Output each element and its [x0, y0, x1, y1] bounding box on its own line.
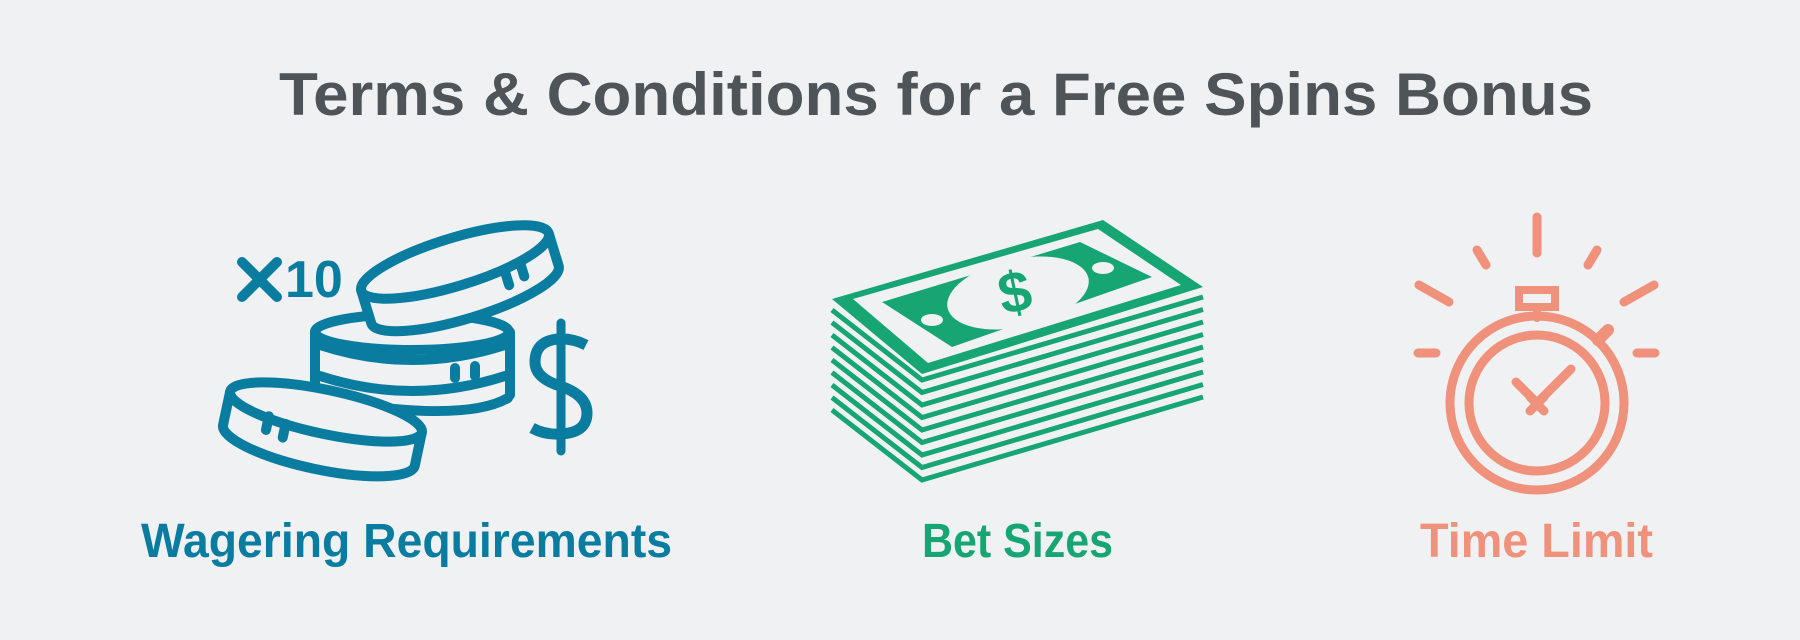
icon: stopwatch	[1418, 217, 1655, 490]
label: bet sizes: Bet Sizes	[922, 515, 1113, 568]
coin stack	[315, 314, 510, 411]
icon: coins	[218, 210, 587, 489]
stripes	[832, 297, 1203, 480]
watch body	[1450, 290, 1624, 490]
rays	[1418, 217, 1655, 353]
label: time limit: Time Limit	[1420, 515, 1653, 568]
bottom coin	[218, 370, 426, 489]
title: Terms & Conditions for a Free Spins Bonus	[279, 61, 1593, 128]
top bill	[832, 220, 1203, 374]
label: wagering requirements: Wagering Requirements	[141, 515, 672, 568]
dollar sign	[532, 323, 587, 451]
x10 label: 10	[285, 251, 343, 309]
top bill: $	[992, 257, 1037, 328]
icon: money stack	[832, 220, 1203, 480]
x10 label	[242, 251, 343, 309]
top coin	[354, 210, 566, 346]
